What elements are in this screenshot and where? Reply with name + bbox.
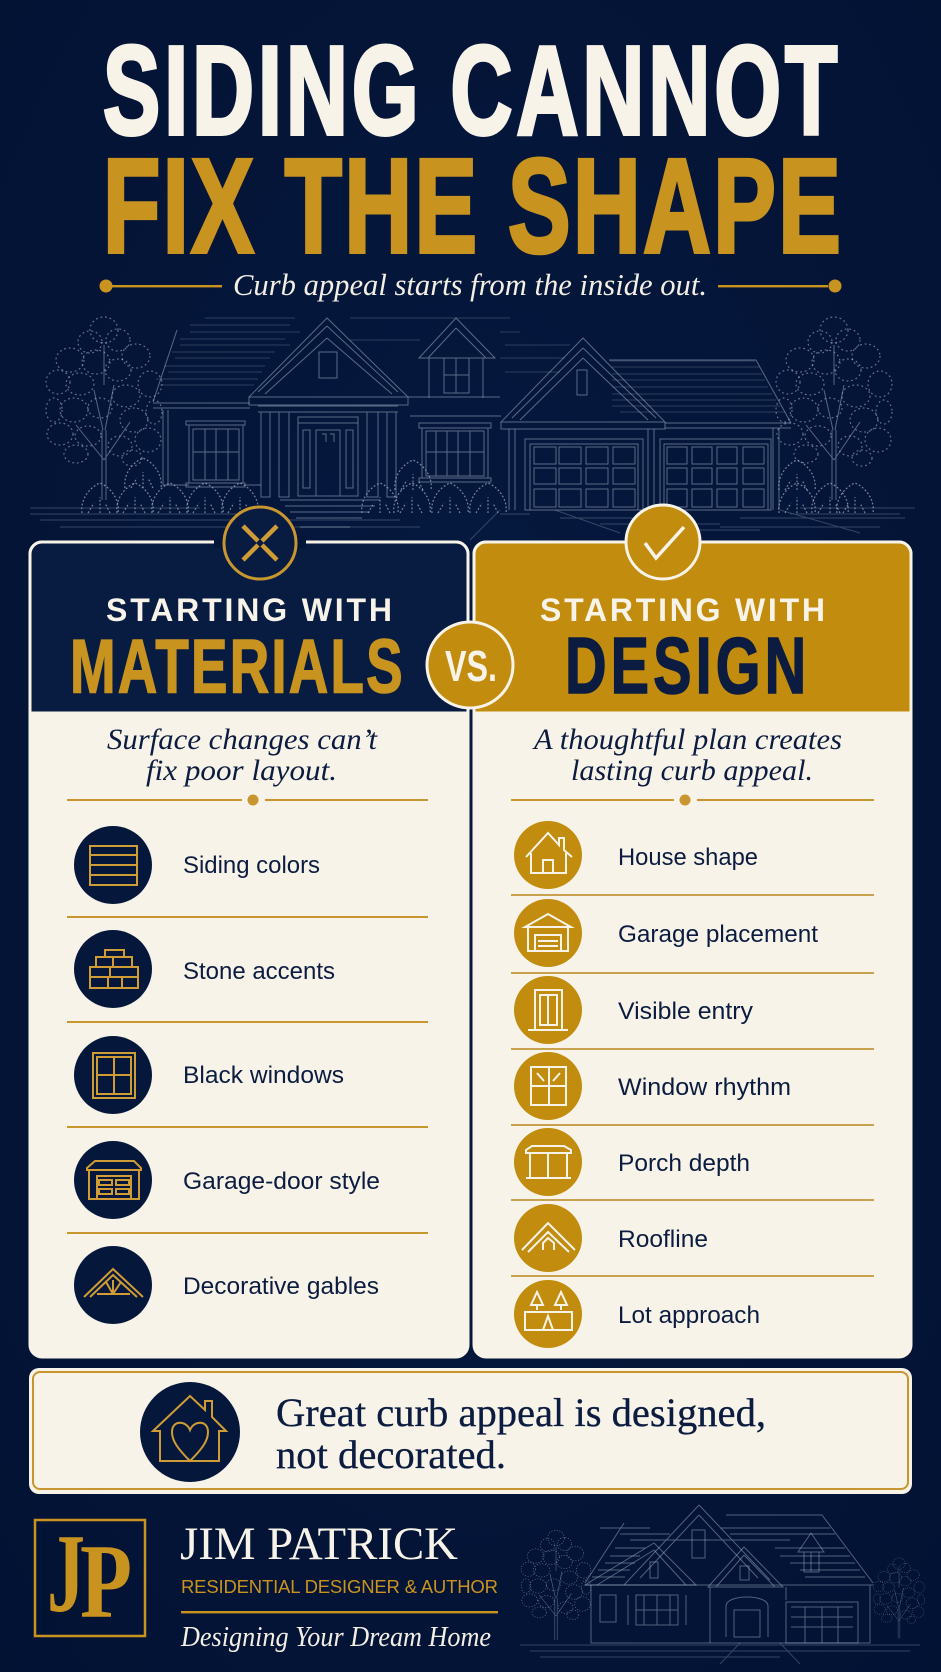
callout	[29, 1368, 912, 1494]
item: siding colors	[74, 826, 320, 904]
subheading	[532, 723, 842, 787]
title	[103, 19, 841, 281]
author block: Designing Your Dream Home	[180, 1622, 491, 1653]
divider	[67, 794, 428, 806]
roof shingles	[156, 318, 785, 412]
small house gables	[585, 1530, 824, 1587]
subtitle with ornament lines	[100, 267, 842, 302]
author block	[180, 1518, 498, 1653]
panel header	[474, 542, 911, 713]
item: garage placement	[514, 899, 818, 967]
item: roofline	[514, 1204, 708, 1272]
subtitle with ornament lines: Curb appeal starts from the inside out.	[233, 267, 707, 302]
heading: MATERIALS	[70, 625, 403, 710]
icon: house with heart	[140, 1382, 240, 1482]
item: lot approach	[514, 1280, 760, 1348]
ground lines	[30, 508, 915, 540]
item: garage-door style: Garage-door style	[183, 1168, 380, 1195]
small house illustration	[520, 1505, 925, 1664]
item: house shape: House shape	[618, 844, 758, 871]
left window	[186, 421, 245, 487]
icon: X badge	[224, 507, 296, 579]
item: window rhythm	[514, 1052, 791, 1120]
item: visible entry: Visible entry	[618, 998, 753, 1025]
walls	[163, 410, 779, 510]
subheading: lasting curb appeal.	[571, 754, 813, 787]
title: SIDING CANNOT	[103, 19, 837, 161]
door	[280, 417, 380, 527]
item: black windows	[74, 1036, 344, 1114]
panel: starting with design	[474, 505, 911, 1357]
item: stone accents: Stone accents	[183, 958, 335, 985]
icon: check badge	[626, 505, 700, 579]
item: decorative gables	[74, 1246, 379, 1324]
garage door 2	[660, 439, 771, 510]
item: garage placement: Garage placement	[618, 921, 818, 948]
callout text: Great curb appeal is designed,	[276, 1390, 766, 1435]
item: black windows: Black windows	[183, 1062, 344, 1089]
small house window, door, garage	[600, 1587, 858, 1643]
subheading	[107, 723, 378, 787]
item: house shape	[514, 821, 758, 889]
item: porch depth	[514, 1128, 750, 1196]
garage door 1	[525, 439, 643, 510]
blueprint house illustration	[30, 317, 915, 540]
roof outline	[153, 330, 791, 428]
item: visible entry	[514, 976, 753, 1044]
logo: JP monogram	[35, 1512, 145, 1640]
panel: starting with materials	[30, 507, 468, 1357]
item: stone accents	[74, 930, 335, 1008]
icon: small right tree	[873, 1558, 925, 1638]
subheading: A thoughtful plan creates	[532, 723, 842, 756]
heading: DESIGN	[565, 621, 806, 710]
heading	[540, 592, 825, 710]
icon: left tree	[46, 317, 162, 500]
panel body	[30, 542, 468, 1357]
divider	[511, 794, 874, 806]
small house roof and walls	[585, 1505, 873, 1643]
columns and porch	[258, 406, 398, 497]
shrubs	[82, 458, 873, 513]
VS badge	[427, 622, 513, 708]
callout text: not decorated.	[276, 1432, 506, 1477]
garage gable	[501, 338, 665, 429]
heading: STARTING WITH	[540, 592, 825, 628]
item: porch depth: Porch depth	[618, 1150, 750, 1177]
author block: JIM PATRICK	[180, 1518, 458, 1570]
dormer	[419, 318, 495, 398]
item: lot approach: Lot approach	[618, 1302, 760, 1329]
item: roofline: Roofline	[618, 1226, 708, 1253]
title: FIX THE SHAPE	[103, 130, 841, 281]
small house ground	[520, 1643, 920, 1664]
item: window rhythm: Window rhythm	[618, 1074, 791, 1101]
panel body	[474, 542, 911, 1357]
item: decorative gables: Decorative gables	[183, 1273, 379, 1300]
item: siding colors: Siding colors	[183, 852, 320, 879]
right window	[419, 423, 491, 482]
heading: STARTING WITH	[106, 592, 392, 628]
list: materials	[67, 826, 428, 1324]
list: design	[511, 821, 874, 1348]
VS badge: VS.	[445, 642, 497, 691]
author block: RESIDENTIAL DESIGNER & AUTHOR	[181, 1576, 498, 1597]
icon: right tree	[776, 317, 892, 500]
callout text	[276, 1390, 766, 1477]
logo: JP monogram: J	[47, 1512, 85, 1636]
main gable	[249, 318, 408, 405]
subheading: fix poor layout.	[146, 754, 337, 787]
item: garage-door style	[74, 1141, 380, 1219]
panel header	[30, 542, 468, 713]
logo: JP monogram: P	[80, 1523, 132, 1640]
icon: small left tree	[521, 1530, 591, 1640]
subheading: Surface changes can’t	[107, 723, 378, 756]
